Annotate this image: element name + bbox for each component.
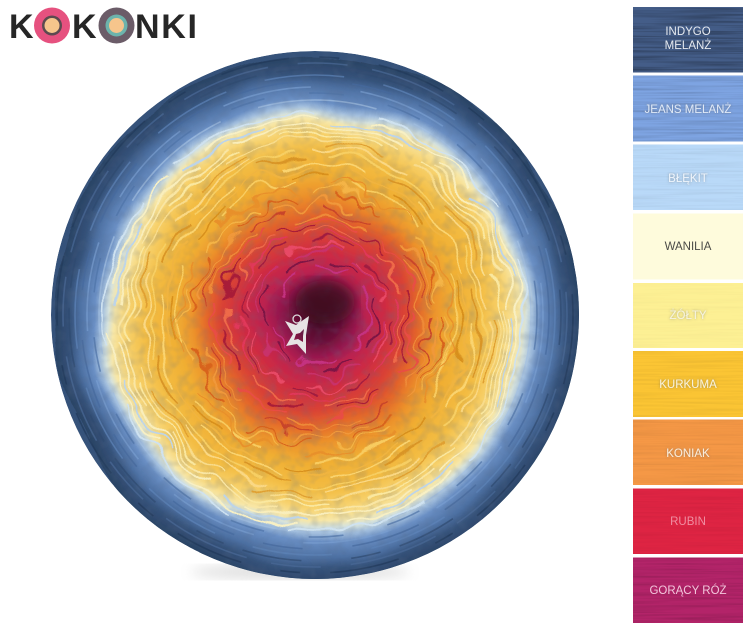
swatch: Indygo Melanż: MELANŻ xyxy=(665,39,711,52)
vanilla and pale blue strands xyxy=(106,110,526,530)
swatch: Indygo Melanż: INDYGO xyxy=(665,26,711,38)
yarn surface mottling xyxy=(56,61,574,548)
logo ring: pink xyxy=(34,8,70,44)
swatch: Wanilia: WANILIA xyxy=(665,241,712,253)
swatch: Rubin xyxy=(633,488,743,554)
logo letters: NKI xyxy=(135,8,197,46)
yarn body xyxy=(50,50,580,584)
swatch: Żółty xyxy=(633,283,743,348)
swatch: Błękit: BŁĘKIT xyxy=(668,173,708,185)
logo ring: grey and teal xyxy=(98,8,134,44)
swatch: Kurkuma xyxy=(633,351,743,417)
swatch: Koniak xyxy=(633,420,743,485)
swatch: Kurkuma: KURKUMA xyxy=(659,379,717,391)
swatch: Żółty: ŻÓŁTY xyxy=(669,309,707,322)
dark core xyxy=(295,280,355,324)
swatch: Koniak: KONIAK xyxy=(666,448,710,460)
yarn cake xyxy=(50,50,580,584)
swatch: Gorący Róż: GORĄCY RÓŻ xyxy=(649,584,727,597)
base colour gradient xyxy=(51,51,579,579)
yellow strands xyxy=(135,139,497,501)
ground shadow xyxy=(190,565,410,579)
logo letters xyxy=(9,8,197,46)
swatch: Jeans Melanż xyxy=(633,76,743,142)
logo letters: K xyxy=(9,8,34,46)
star charm xyxy=(285,315,309,354)
swatch: Błękit xyxy=(633,144,743,210)
swatch: Jeans Melanż: JEANS MELANŻ xyxy=(645,103,731,116)
logo: KOKONKI xyxy=(9,8,197,46)
swatch: Indygo Melanż xyxy=(633,7,743,72)
swatch: Rubin: RUBIN xyxy=(670,516,706,528)
colour swatches xyxy=(633,7,743,623)
swatch: Gorący Róż xyxy=(633,558,743,623)
logo letters: K xyxy=(72,8,97,46)
swatch: Wanilia xyxy=(633,214,743,280)
red strands xyxy=(216,218,416,418)
magenta strands xyxy=(260,252,384,376)
indigo and jeans strands xyxy=(57,57,573,573)
orange strands xyxy=(181,185,451,455)
